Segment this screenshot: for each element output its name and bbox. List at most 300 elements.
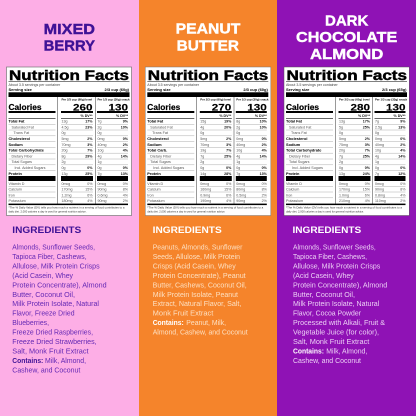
nutrition label: dark chocolate almond: 90mg bbox=[375, 188, 384, 192]
nutrition label: dark chocolate almond bbox=[284, 67, 409, 216]
heading: mixed berry bbox=[44, 22, 95, 54]
nutrition label: dark chocolate almond: 25% bbox=[363, 154, 371, 158]
nutrition label: mixed berry: 13g bbox=[62, 172, 68, 176]
nutrition label: mixed berry: 0.6mg bbox=[98, 193, 108, 197]
nutrition label: dark chocolate almond: 0% bbox=[365, 182, 371, 186]
nutrition label: peanut butter: % DV** bbox=[219, 114, 232, 118]
nutrition label: dark chocolate almond: 110mg bbox=[375, 199, 386, 203]
nutrition label: dark chocolate almond: 0% bbox=[365, 166, 371, 170]
nutrition label: dark chocolate almond: 2% bbox=[400, 143, 406, 147]
nutrition label: peanut butter: Per 1/3 cup (30g) snack bbox=[236, 98, 269, 102]
ingredients list: dark chocolate almond: Salt, Monk Fruit Extract bbox=[293, 339, 369, 346]
nutrition label: peanut butter: 270 bbox=[212, 102, 231, 113]
nutrition label: mixed berry bbox=[6, 67, 132, 216]
nutrition label: dark chocolate almond: 2/3 cup (65g) bbox=[382, 87, 407, 92]
nutrition label: mixed berry: Incl. Added Sugars bbox=[14, 166, 46, 170]
nutrition label: mixed berry: 3% bbox=[87, 143, 93, 147]
nutrition label: mixed berry: 130 bbox=[108, 102, 128, 113]
nutrition label: mixed berry: 260 bbox=[73, 102, 92, 113]
nutrition label: peanut butter: Sodium bbox=[147, 142, 162, 147]
nutrition label: mixed berry: 40mg bbox=[98, 143, 106, 147]
nutrition label: mixed berry: Potassium bbox=[8, 199, 26, 203]
ingredients: mixed berry bbox=[12, 225, 107, 374]
nutrition label: mixed berry: 14% bbox=[121, 154, 129, 158]
nutrition label: mixed berry: 180mg bbox=[62, 199, 72, 203]
nutrition label: dark chocolate almond: 3% bbox=[365, 143, 371, 147]
nutrition label: dark chocolate almond: 40mg bbox=[375, 143, 384, 147]
nutrition label: peanut butter: 20% bbox=[224, 125, 232, 129]
nutrition label: mixed berry: 7% bbox=[87, 149, 93, 153]
nutrition label: dark chocolate almond: 12% bbox=[398, 172, 406, 176]
nutrition label: dark chocolate almond: 17% bbox=[363, 120, 371, 124]
nutrition label: mixed berry: 2g bbox=[98, 125, 102, 129]
nutrition label: peanut butter: 15% bbox=[224, 188, 232, 192]
nutrition label: peanut butter bbox=[145, 67, 271, 216]
nutrition label: dark chocolate almond: 14% bbox=[398, 154, 406, 158]
nutrition label: dark chocolate almond: Dietary Fiber bbox=[289, 154, 311, 158]
ingredients: peanut butter bbox=[153, 225, 248, 337]
nutrition label: peanut butter: 2% bbox=[262, 193, 268, 197]
ingredients list: peanut butter: Monk Fruit Extract bbox=[153, 311, 213, 318]
nutrition label: mixed berry: 0g bbox=[62, 166, 66, 170]
ingredients list: dark chocolate almond: Vegetable Juice (for color), bbox=[293, 330, 379, 337]
nutrition label: peanut butter: 0g bbox=[236, 166, 240, 170]
nutrition label: peanut butter: 14g bbox=[200, 172, 206, 176]
nutrition label: peanut butter: 1g bbox=[236, 160, 240, 164]
heading: mixed berry: BERRY bbox=[44, 38, 95, 54]
ingredients list: dark chocolate almond: Almonds, Sunflower Seeds, bbox=[293, 244, 376, 252]
ingredients: peanut butter: INGREDIENTS bbox=[153, 225, 222, 235]
nutrition label: mixed berry: Per 2/3 cup (60g) bowl bbox=[62, 98, 92, 102]
nutrition label: mixed berry: 0mg bbox=[98, 137, 104, 141]
nutrition label: dark chocolate almond: Total Sugars bbox=[289, 160, 310, 164]
nutrition label: mixed berry: 2% bbox=[123, 199, 129, 203]
nutrition label: peanut butter: Nutrition Facts bbox=[148, 67, 269, 83]
nutrition label: mixed berry: Total Sugars bbox=[12, 160, 32, 164]
nutrition label: peanut butter: Total Fat bbox=[147, 119, 164, 124]
nutrition label: peanut butter: 28% bbox=[224, 172, 232, 176]
nutrition label: mixed berry: 2g bbox=[62, 160, 66, 164]
ingredients list: mixed berry: Tapioca Fiber, Cashews, bbox=[12, 254, 87, 261]
nutrition label: dark chocolate almond: 10g bbox=[375, 149, 381, 153]
nutrition label: peanut butter: 10% bbox=[260, 120, 268, 124]
ingredients list: dark chocolate almond: Butter, Coconut Oil, bbox=[293, 292, 355, 299]
nutrition label: peanut butter: 0% bbox=[226, 182, 232, 186]
nutrition label: peanut butter: 0% bbox=[226, 166, 232, 170]
nutrition label: mixed berry: 2% bbox=[87, 137, 93, 141]
nutrition label: peanut butter: 40mg bbox=[236, 143, 245, 147]
nutrition label: peanut butter: 90mg bbox=[236, 199, 245, 203]
nutrition label: peanut butter: Calcium bbox=[147, 188, 161, 192]
nutrition label: peanut butter: Dietary Fiber bbox=[150, 154, 172, 158]
nutrition label: peanut butter: 160mg bbox=[200, 188, 211, 192]
nutrition label: dark chocolate almond: 0.8mg bbox=[375, 193, 385, 197]
nutrition label: peanut butter: 7% bbox=[226, 149, 232, 153]
ingredients list: dark chocolate almond: Allulose, Milk Protein Crisps bbox=[293, 263, 381, 270]
nutrition label: dark chocolate almond: 1.0mg bbox=[339, 193, 349, 197]
nutrition label: peanut butter: 80mg bbox=[236, 188, 245, 192]
nutrition label: dark chocolate almond: 4% bbox=[400, 193, 406, 197]
nutrition label: mixed berry: 13% bbox=[121, 172, 129, 176]
nutrition label: mixed berry: 4.5g bbox=[62, 125, 68, 129]
nutrition label: peanut butter: 0% bbox=[262, 182, 268, 186]
ingredients list: mixed berry: Flavor, Freeze Dried bbox=[12, 311, 75, 318]
ingredients list: mixed berry: Allulose, Milk Protein Crisps bbox=[12, 263, 100, 270]
nutrition label: peanut butter: 70mg bbox=[200, 143, 209, 147]
nutrition label: mixed berry: 25% bbox=[85, 172, 93, 176]
nutrition label: dark chocolate almond: 7% bbox=[365, 149, 371, 153]
nutrition label: dark chocolate almond: Per 1/3 cup (33g) snack bbox=[375, 98, 408, 102]
nutrition label: mixed berry: 4% bbox=[123, 149, 129, 153]
nutrition label: dark chocolate almond: 0mcg bbox=[375, 182, 384, 186]
nutrition label: peanut butter: About 3.5 servings per container bbox=[147, 83, 200, 87]
ingredients list: mixed berry: Freeze Dried Raspberries, bbox=[12, 330, 93, 337]
nutrition label: dark chocolate almond: 20g bbox=[339, 149, 345, 153]
nutrition label: dark chocolate almond: Total Carbohydrate bbox=[286, 148, 322, 153]
nutrition label: mixed berry: % DV** bbox=[116, 114, 129, 118]
nutrition label: peanut butter: Incl. Added Sugars bbox=[153, 166, 184, 170]
ingredients list: dark chocolate almond: Processed with Alkali, Fruit & bbox=[293, 320, 385, 327]
nutrition label: peanut butter: 4g bbox=[200, 125, 204, 129]
ingredients list: dark chocolate almond: Milk, Almond, bbox=[326, 348, 367, 356]
nutrition label: peanut butter: 10g bbox=[236, 149, 242, 153]
nutrition label: dark chocolate almond: 24% bbox=[363, 172, 371, 176]
nutrition label: dark chocolate almond: 13g bbox=[339, 120, 345, 124]
nutrition label: dark chocolate almond: 0g bbox=[375, 166, 379, 170]
nutrition label: peanut butter: Per 2/3 cup (60g) bowl bbox=[200, 98, 231, 102]
nutrition label: dark chocolate almond: Incl. Added Sugars bbox=[292, 166, 323, 170]
nutrition label: dark chocolate almond: Serving size bbox=[286, 87, 310, 92]
nutrition label: dark chocolate almond: 0% bbox=[400, 182, 406, 186]
nutrition label: mixed berry: 29% bbox=[85, 154, 93, 158]
nutrition label: dark chocolate almond: About 3.5 servings per container bbox=[286, 83, 339, 87]
nutrition label: dark chocolate almond: 5mg bbox=[339, 137, 346, 141]
nutrition label: peanut butter: 3% bbox=[226, 143, 232, 147]
nutrition label: mixed berry: 5mg bbox=[62, 137, 68, 141]
nutrition label: dark chocolate almond: 210mg bbox=[339, 199, 350, 203]
nutrition label: mixed berry: 170mg bbox=[62, 188, 72, 192]
nutrition label: mixed berry: 4% bbox=[87, 199, 93, 203]
nutrition label: dark chocolate almond: Calories bbox=[286, 103, 320, 112]
nutrition label: mixed berry: 1.2mg bbox=[62, 193, 72, 197]
nutrition label: dark chocolate almond: % DV** bbox=[394, 114, 406, 118]
nutrition label: dark chocolate almond: 0% bbox=[400, 166, 406, 170]
ingredients list: dark chocolate almond: Tapioca Fiber, Cashews, bbox=[293, 254, 367, 261]
ingredients: dark chocolate almond bbox=[292, 225, 387, 365]
nutrition label: mixed berry: 17% bbox=[85, 120, 93, 124]
nutrition label: peanut butter: Serving size bbox=[147, 87, 171, 92]
nutrition label: peanut butter: 4g bbox=[236, 154, 240, 158]
nutrition label: dark chocolate almond: Vitamin D bbox=[286, 182, 302, 186]
panel: peanut butter bbox=[139, 0, 277, 416]
nutrition label: peanut butter: Iron bbox=[147, 193, 154, 197]
ingredients list: mixed berry: Contains: bbox=[12, 358, 43, 365]
nutrition label: dark chocolate almond: 0% bbox=[400, 137, 406, 141]
nutrition label: dark chocolate almond: 0g bbox=[375, 131, 379, 135]
nutrition label: peanut butter: 10% bbox=[260, 125, 268, 129]
nutrition label: peanut butter: 130 bbox=[247, 102, 267, 113]
ingredients list: dark chocolate almond bbox=[293, 244, 387, 365]
nutrition label: mixed berry: *The % Daily Value (DV) tells you how much a nutrient in a serving of food contributes to a bbox=[8, 206, 125, 210]
panel: dark chocolate almond bbox=[277, 0, 416, 416]
ingredients list: peanut butter: Seeds, Allulose, Milk Protein bbox=[153, 254, 240, 261]
ingredients list: peanut butter: Butter, Cashews, Coconut Oil, bbox=[153, 282, 247, 289]
nutrition label: dark chocolate almond: Protein bbox=[286, 171, 300, 176]
ingredients list: mixed berry: Butter, Coconut Oil, bbox=[12, 292, 75, 299]
nutrition label: dark chocolate almond: Saturated Fat bbox=[289, 125, 311, 129]
ingredients list: peanut butter: Milk Protein Isolate, Peanut bbox=[153, 292, 238, 299]
nutrition label: mixed berry: 90mg bbox=[98, 188, 106, 192]
nutrition label: dark chocolate almond: Cholesterol bbox=[286, 136, 307, 141]
ingredients list: peanut butter bbox=[153, 244, 248, 337]
nutrition label: dark chocolate almond: Iron bbox=[286, 193, 292, 197]
nutrition label: mixed berry: Calories bbox=[8, 103, 42, 112]
nutrition label: peanut butter: Calories bbox=[147, 103, 181, 112]
ingredients list: peanut butter: Crisps (Acid Casein, Whey bbox=[153, 263, 236, 270]
heading: dark chocolate almond: ALMOND bbox=[310, 47, 383, 63]
nutrition label: mixed berry: Cholesterol bbox=[8, 136, 30, 141]
nutrition label: mixed berry: 0% bbox=[87, 166, 93, 170]
ingredients list: dark chocolate almond: Protein Concentrate), Almond bbox=[293, 282, 387, 289]
nutrition label: mixed berry: 4g bbox=[98, 154, 102, 158]
nutrition label: peanut butter: Trans Fat bbox=[152, 131, 168, 135]
nutrition label: mixed berry: Protein bbox=[8, 171, 23, 176]
nutrition label: mixed berry: Vitamin D bbox=[8, 182, 25, 186]
nutrition label: peanut butter: 2/3 cup (60g) bbox=[243, 87, 268, 92]
nutrition label: mixed berry: 0g bbox=[98, 166, 102, 170]
ingredients list: mixed berry: Almonds, Sunflower Seeds, bbox=[12, 244, 95, 252]
nutrition label: peanut butter: 0.9mg bbox=[200, 193, 210, 197]
nutrition label: mixed berry: 0% bbox=[123, 166, 129, 170]
nutrition label: mixed berry: 7g bbox=[98, 172, 102, 176]
ingredients: dark chocolate almond: INGREDIENTS bbox=[292, 225, 361, 235]
nutrition label: peanut butter: Saturated Fat bbox=[150, 125, 173, 129]
nutrition label: peanut butter: daily diet. 2,000 calories a day is used for general nutrition advice. bbox=[147, 209, 225, 213]
nutrition label: dark chocolate almond: 1g bbox=[375, 160, 379, 164]
nutrition label: dark chocolate almond: 2% bbox=[400, 199, 406, 203]
nutrition label: peanut butter: 19% bbox=[224, 120, 232, 124]
nutrition label: mixed berry: Total Fat bbox=[8, 119, 25, 124]
ingredients list: peanut butter: Protein Concentrate), Peanut bbox=[153, 273, 246, 280]
nutrition label: mixed berry: 1g bbox=[98, 160, 102, 164]
nutrition label: peanut butter: 7g bbox=[200, 154, 204, 158]
nutrition label: peanut butter: Protein bbox=[147, 171, 161, 176]
ingredients list: peanut butter: Almond, Cashew, and Coconut bbox=[153, 330, 248, 337]
nutrition label: peanut butter: Vitamin D bbox=[147, 182, 164, 186]
nutrition label: dark chocolate almond: 5g bbox=[339, 125, 343, 129]
nutrition label: peanut butter: 0mg bbox=[236, 137, 243, 141]
nutrition label: peanut butter: 0% bbox=[262, 166, 268, 170]
nutrition label: peanut butter: 0.5mg bbox=[236, 193, 246, 197]
nutrition label: mixed berry: 9% bbox=[123, 120, 129, 124]
ingredients list: mixed berry: Salt, Monk Fruit Extract bbox=[12, 348, 89, 356]
nutrition label: peanut butter: 0g bbox=[200, 131, 204, 135]
ingredients list: mixed berry: Protein Concentrate), Almond bbox=[12, 282, 107, 289]
nutrition label: dark chocolate almond: Potassium bbox=[286, 199, 303, 203]
nutrition label: mixed berry: % DV** bbox=[81, 114, 93, 118]
nutrition label: peanut butter: 0g bbox=[200, 166, 204, 170]
nutrition label: peanut butter: Total Sugars bbox=[150, 160, 171, 164]
nutrition label: dark chocolate almond: 170mg bbox=[339, 188, 350, 192]
nutrition label: mixed berry: Calcium bbox=[8, 188, 22, 192]
nutrition label: dark chocolate almond: *The % Daily Value (DV) tells you how much a nutrient in a serving of food contributes to a bbox=[286, 206, 402, 210]
nutrition label: dark chocolate almond: 0mg bbox=[375, 137, 382, 141]
nutrition label: dark chocolate almond: 9% bbox=[400, 120, 406, 124]
nutrition label: mixed berry: 8% bbox=[123, 188, 129, 192]
nutrition label: mixed berry: 2/3 cup (60g) bbox=[105, 87, 130, 92]
nutrition label: mixed berry: 23% bbox=[85, 125, 93, 129]
nutrition label: mixed berry: 15% bbox=[85, 188, 93, 192]
nutrition label: peanut butter: 2g bbox=[200, 160, 204, 164]
nutrition label: dark chocolate almond: daily diet. 2,000 calories a day is used for general nutrition advice. bbox=[286, 209, 364, 213]
heading: mixed berry: MIXED bbox=[44, 22, 95, 38]
nutrition label: mixed berry: 0g bbox=[62, 131, 66, 135]
nutrition label: dark chocolate almond: 13g bbox=[339, 172, 345, 176]
nutrition label: peanut butter: 19g bbox=[200, 149, 206, 153]
nutrition label: peanut butter: 0mcg bbox=[200, 182, 209, 186]
nutrition label: mixed berry: 10% bbox=[121, 125, 129, 129]
nutrition label: dark chocolate almond: Calcium bbox=[286, 188, 299, 192]
nutrition label: mixed berry: 2% bbox=[123, 143, 129, 147]
nutrition label: dark chocolate almond: 7g bbox=[375, 120, 379, 124]
nutrition label: dark chocolate almond: 13% bbox=[398, 125, 406, 129]
nutrition label: dark chocolate almond: 4% bbox=[400, 149, 406, 153]
ingredients list: dark chocolate almond: Milk Protein Isolate, Natural bbox=[293, 301, 380, 308]
nutrition label: mixed berry: Nutrition Facts bbox=[9, 67, 129, 83]
nutrition label: peanut butter: Cholesterol bbox=[147, 136, 169, 141]
nutrition label: dark chocolate almond: 75mg bbox=[339, 143, 348, 147]
nutrition label: mixed berry: Trans Fat bbox=[14, 131, 29, 135]
nutrition label: peanut butter: *The % Daily Value (DV) tells you how much a nutrient in a serving of food contributes to a bbox=[147, 206, 264, 210]
nutrition label: mixed berry: Per 1/3 cup (30g) snack bbox=[98, 98, 130, 102]
ingredients list: mixed berry: Milk Protein Isolate, Natural bbox=[12, 301, 99, 308]
nutrition label: mixed berry: daily diet. 2,000 calories a day is used for general nutrition advice. bbox=[8, 209, 87, 213]
nutrition label: peanut butter: 7g bbox=[236, 172, 240, 176]
nutrition label: dark chocolate almond: 7g bbox=[339, 154, 343, 158]
nutrition label: peanut butter: % DV** bbox=[255, 114, 267, 118]
ingredients list: dark chocolate almond: Contains: bbox=[293, 348, 324, 356]
nutrition label: peanut butter: 4% bbox=[262, 149, 268, 153]
nutrition label: peanut butter: 0% bbox=[262, 137, 268, 141]
panel: mixed berry bbox=[0, 0, 139, 416]
ingredients list: peanut butter: Extract, Natural Flavor, Salt, bbox=[153, 301, 241, 308]
nutrition label: dark chocolate almond: 6% bbox=[365, 193, 371, 197]
nutrition label: peanut butter: 2% bbox=[262, 199, 268, 203]
nutrition label: mixed berry: 20g bbox=[62, 149, 68, 153]
nutrition label: dark chocolate almond: 4% bbox=[365, 199, 371, 203]
heading: dark chocolate almond: DARK bbox=[325, 13, 369, 29]
nutrition label: mixed berry: 0% bbox=[123, 182, 129, 186]
nutrition label: dark chocolate almond: 25% bbox=[363, 125, 371, 129]
nutrition label: mixed berry: Dietary Fiber bbox=[12, 154, 33, 158]
nutrition label: mixed berry: 0% bbox=[123, 137, 129, 141]
nutrition label: dark chocolate almond: Nutrition Facts bbox=[286, 67, 407, 83]
nutrition label: mixed berry: 90mg bbox=[98, 199, 106, 203]
nutrition label: mixed berry: 8g bbox=[62, 154, 66, 158]
ingredients: mixed berry: INGREDIENTS bbox=[12, 225, 81, 235]
ingredients list: mixed berry: Blueberries, bbox=[12, 320, 49, 327]
nutrition label: mixed berry: Total Carbohydrate bbox=[8, 148, 45, 153]
nutrition label: peanut butter: 190mg bbox=[200, 199, 211, 203]
ingredients list: mixed berry: (Acid Casein, Whey bbox=[12, 273, 73, 280]
heading: dark chocolate almond: CHOCOLATE bbox=[296, 30, 398, 46]
nutrition label: mixed berry: Sodium bbox=[8, 142, 23, 147]
nutrition label: mixed berry: Saturated Fat bbox=[12, 125, 34, 129]
ingredients list: dark chocolate almond: (Acid Casein, Whey bbox=[293, 273, 354, 280]
nutrition label: dark chocolate almond: 2.5g bbox=[375, 125, 382, 129]
nutrition label: dark chocolate almond: 7g bbox=[375, 172, 379, 176]
nutrition label: dark chocolate almond: 130 bbox=[386, 102, 406, 113]
nutrition label: mixed berry: About 3.5 servings per container bbox=[8, 83, 61, 87]
nutrition label: mixed berry: Iron bbox=[8, 193, 15, 197]
ingredients list: dark chocolate almond: Flavor, Cocoa Powder bbox=[293, 311, 362, 318]
nutrition label: dark chocolate almond: Sodium bbox=[286, 142, 301, 147]
nutrition label: mixed berry: 4% bbox=[123, 193, 129, 197]
nutrition label: peanut butter: 4% bbox=[226, 199, 232, 203]
nutrition label: dark chocolate almond: 0g bbox=[339, 166, 343, 170]
nutrition label: mixed berry: 6% bbox=[87, 193, 93, 197]
nutrition label: peanut butter: 2% bbox=[226, 137, 232, 141]
heading: peanut butter: BUTTER bbox=[177, 38, 239, 54]
nutrition label: peanut butter: 14% bbox=[260, 154, 268, 158]
ingredients list: mixed berry bbox=[12, 244, 107, 374]
heading: dark chocolate almond bbox=[296, 13, 398, 63]
ingredients list: mixed berry: Freeze Dried Strawberries, bbox=[12, 339, 97, 346]
nutrition label: peanut butter: 15g bbox=[200, 120, 206, 124]
nutrition label: dark chocolate almond: 280 bbox=[350, 102, 370, 113]
heading: peanut butter bbox=[176, 22, 240, 54]
nutrition label: peanut butter: 25% bbox=[224, 154, 232, 158]
ingredients list: mixed berry: Cashew, and Coconut bbox=[12, 367, 80, 374]
nutrition label: peanut butter: 5mg bbox=[200, 137, 207, 141]
nutrition label: dark chocolate almond: Per 2/3 cup (65g) bowl bbox=[339, 98, 370, 102]
nutrition label: dark chocolate almond: 8% bbox=[400, 188, 406, 192]
nutrition label: peanut butter: Total Carb. bbox=[147, 148, 167, 153]
nutrition label: mixed berry: 0mcg bbox=[98, 182, 106, 186]
nutrition label: dark chocolate almond: 0mcg bbox=[339, 182, 348, 186]
nutrition label: peanut butter: 13% bbox=[260, 172, 268, 176]
nutrition label: dark chocolate almond: % DV** bbox=[358, 114, 371, 118]
nutrition label: peanut butter: 0g bbox=[236, 131, 240, 135]
nutrition label: peanut butter: 8g bbox=[236, 120, 240, 124]
ingredients list: peanut butter: Peanut, Milk, bbox=[186, 320, 226, 327]
nutrition label: peanut butter: 2% bbox=[262, 143, 268, 147]
nutrition label: mixed berry: 0% bbox=[87, 182, 93, 186]
nutrition label: mixed berry: 13g bbox=[62, 120, 68, 124]
nutrition label: dark chocolate almond: 4g bbox=[375, 154, 379, 158]
nutrition label: mixed berry: 0g bbox=[98, 131, 102, 135]
nutrition label: dark chocolate almond: 15% bbox=[363, 188, 371, 192]
nutrition label: mixed berry: 70mg bbox=[62, 143, 70, 147]
nutrition label: mixed berry: 7g bbox=[98, 120, 102, 124]
nutrition label: mixed berry: 10g bbox=[98, 149, 104, 153]
nutrition label: mixed berry: 0mcg bbox=[62, 182, 70, 186]
nutrition label: dark chocolate almond: 2% bbox=[365, 137, 371, 141]
nutrition label: peanut butter: 2g bbox=[236, 125, 240, 129]
nutrition label: dark chocolate almond: Trans Fat bbox=[291, 131, 307, 135]
nutrition label: peanut butter: 0mcg bbox=[236, 182, 245, 186]
nutrition label: peanut butter: 8% bbox=[262, 188, 268, 192]
nutrition label: mixed berry: Serving size bbox=[8, 87, 33, 92]
ingredients list: dark chocolate almond: Cashew, and Coconut bbox=[293, 358, 361, 365]
nutrition label: peanut butter: 6% bbox=[226, 193, 232, 197]
ingredients list: peanut butter: Contains: bbox=[153, 320, 184, 327]
nutrition label: dark chocolate almond: 2g bbox=[339, 160, 343, 164]
ingredients list: peanut butter: Peanuts, Almonds, Sunflower bbox=[153, 244, 243, 252]
nutrition label: dark chocolate almond: Total Fat bbox=[286, 119, 303, 124]
ingredients list: mixed berry: Milk, Almond, bbox=[45, 358, 86, 365]
nutrition label: dark chocolate almond: 0g bbox=[339, 131, 343, 135]
